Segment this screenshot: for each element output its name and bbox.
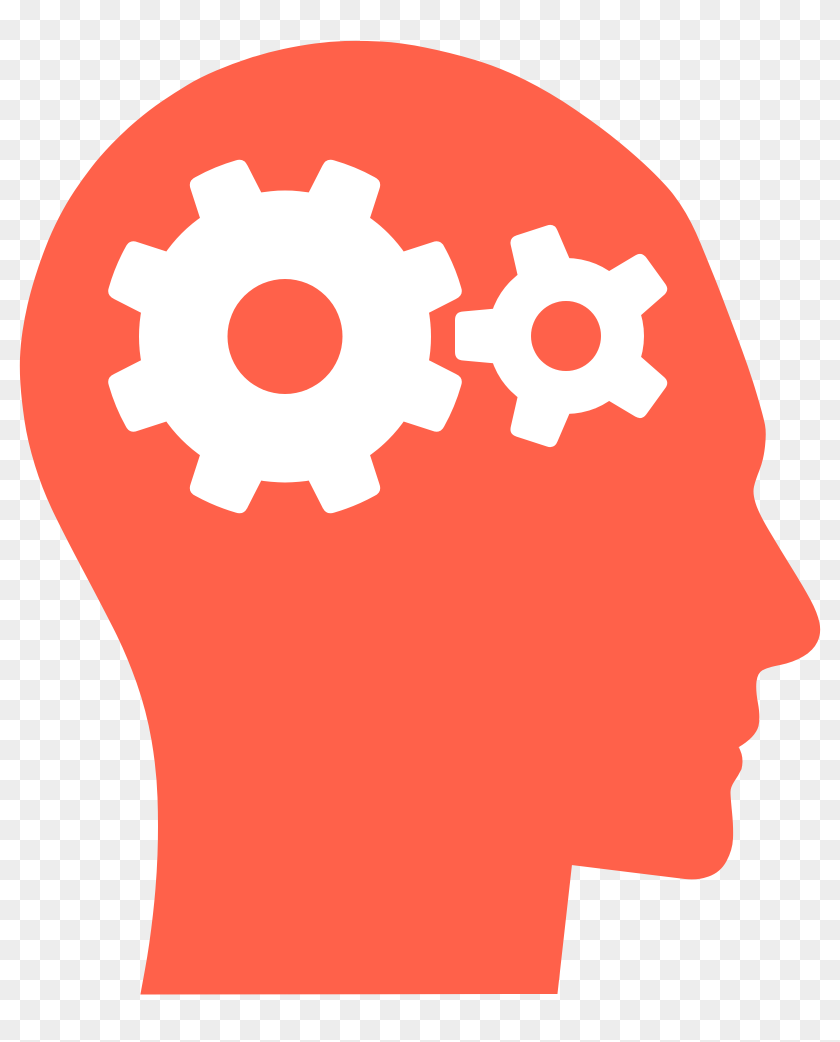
icon: small gear (455, 222, 672, 450)
icon: large gear (103, 155, 467, 518)
